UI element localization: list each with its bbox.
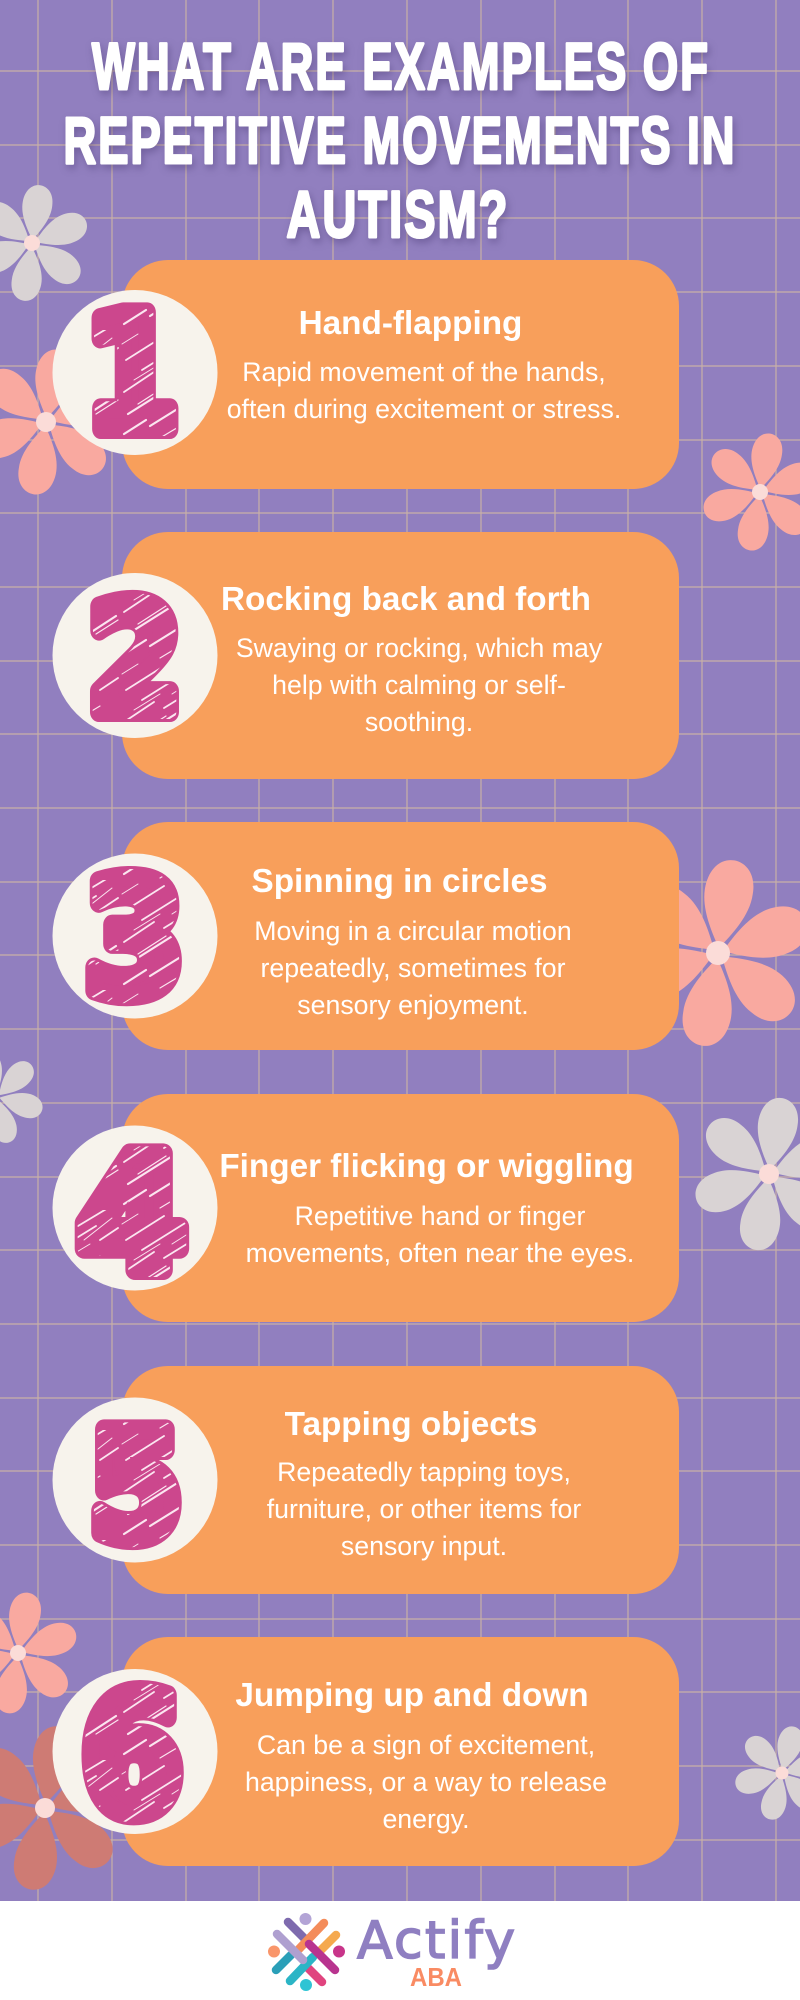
card background: [122, 260, 679, 489]
flower: grey left edge: [0, 1031, 63, 1163]
heading: Jumping up and down: [235, 1677, 589, 1714]
description: energy.: [382, 1804, 470, 1834]
flower: pink right top: [692, 423, 800, 561]
card background: [122, 1094, 679, 1322]
description: [227, 357, 621, 424]
panel: spinning: [52, 822, 679, 1050]
heading: Tapping objects: [285, 1406, 537, 1443]
description: [254, 916, 572, 1020]
description: happiness, or a way to release: [245, 1767, 607, 1797]
number badge 2: 2: [88, 571, 182, 748]
card background: [122, 1637, 679, 1866]
number badge 3: [52, 854, 218, 1018]
description: Repetitive hand or finger: [295, 1201, 585, 1231]
description: furniture, or other items for: [267, 1494, 581, 1524]
description: sensory enjoyment.: [297, 990, 529, 1020]
flower: pink left: [0, 337, 131, 507]
description: Repeatedly tapping toys,: [277, 1457, 571, 1487]
description: often during excitement or stress.: [227, 394, 621, 424]
card background: [122, 1366, 679, 1594]
logo sub mark: ABA: [410, 1962, 462, 1992]
logo wordmark: Actify: [357, 1911, 515, 1971]
number badge 1: [52, 290, 218, 455]
description: movements, often near the eyes.: [246, 1238, 634, 1268]
flower: grey top left: [0, 177, 97, 309]
description: help with calming or self-: [272, 670, 566, 700]
number badge 2: [52, 571, 218, 748]
heading: Rocking back and forth: [221, 581, 591, 618]
panel: finger flicking: [52, 1094, 679, 1322]
logo: [268, 1911, 515, 1992]
card background: [122, 532, 679, 779]
panel: jumping: [52, 1637, 679, 1866]
description: Can be a sign of excitement,: [257, 1730, 595, 1760]
logo mark: [268, 1913, 345, 1991]
description: soothing.: [365, 707, 473, 737]
flower: dark pink lower left: [0, 1712, 140, 1904]
flower: grey right: [680, 1085, 800, 1263]
panel: hand-flapping: [52, 260, 679, 489]
flower: grey bottom right: [724, 1714, 800, 1832]
title: AUTISM?: [286, 177, 510, 251]
number badge 1: 1: [85, 281, 179, 468]
number badge 5: [52, 1398, 218, 1574]
flower: large pink right: [610, 844, 800, 1062]
description: repeatedly, sometimes for: [260, 953, 566, 983]
card background: [122, 822, 679, 1050]
panel: rocking: [52, 532, 679, 779]
number badge 4: 4: [77, 1123, 187, 1308]
description: [236, 633, 603, 737]
number badge 6: [52, 1669, 218, 1834]
number badge 5: 5: [90, 1401, 182, 1574]
description: [246, 1201, 634, 1268]
title: [64, 29, 736, 251]
heading: Hand-flapping: [299, 305, 522, 342]
panel: tapping: [52, 1366, 679, 1594]
number badge 3: 3: [85, 847, 184, 1032]
description: Rapid movement of the hands,: [242, 357, 606, 387]
description: [267, 1457, 581, 1561]
number badge 6: 6: [81, 1659, 183, 1852]
footer band: [0, 1901, 800, 2000]
description: Moving in a circular motion: [254, 916, 572, 946]
heading: Finger flicking or wiggling: [219, 1148, 634, 1185]
description: Swaying or rocking, which may: [236, 633, 603, 663]
description: sensory input.: [341, 1531, 507, 1561]
flower: pink lower left: [0, 1582, 88, 1724]
description: [245, 1730, 607, 1834]
heading: Spinning in circles: [251, 863, 548, 900]
number badge 4: [52, 1126, 218, 1290]
